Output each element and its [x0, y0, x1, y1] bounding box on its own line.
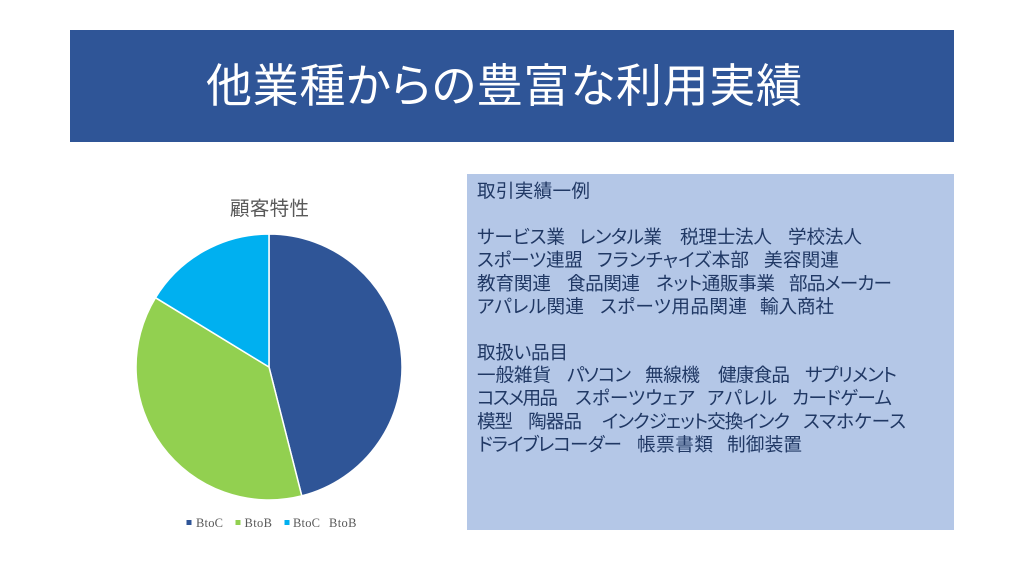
legend	[186, 516, 356, 530]
text block: products: カードゲーム	[792, 387, 892, 408]
text block: industries: レンタル業	[579, 226, 662, 247]
text block: products: アパレル	[707, 387, 777, 408]
text block: industries: スポーツ用品関連	[600, 296, 747, 317]
text block: industries: 学校法人	[788, 226, 862, 247]
text block: products: 帳票書類	[637, 434, 713, 455]
text block: products: 制御装置	[727, 434, 802, 455]
heading: products handled: 取扱い品目	[477, 342, 568, 363]
text block: industries: フランチャイズ本部	[597, 249, 749, 270]
heading: transaction examples: 取引実績一例	[477, 180, 590, 201]
text block: industries: アパレル関連	[477, 296, 584, 317]
text block: industries: ネット通販事業	[656, 273, 775, 294]
pie slice: BtoB	[136, 298, 302, 500]
legend: BtoB	[329, 516, 356, 530]
text block: products	[477, 364, 906, 455]
text block: products: インクジェット交換インク	[602, 411, 790, 432]
pie slice: BtoC	[269, 234, 402, 496]
legend: BtoC	[196, 516, 223, 530]
chart title: 顧客特性	[230, 198, 309, 220]
text block: products: 健康食品	[718, 364, 790, 385]
text block: industries: 教育関連	[477, 273, 551, 294]
text block: industries: 輸入商社	[760, 296, 834, 317]
pie chart: customer characteristics	[136, 198, 402, 530]
text block: products: 一般雑貨	[477, 364, 551, 385]
title banner: 他業種からの豊富な利用実績	[206, 60, 802, 112]
text block: products: パソコン	[567, 364, 631, 385]
text block: products: スマホケース	[803, 411, 906, 432]
text block: products: ドライブレコーダー	[478, 434, 622, 455]
text block: products: 陶器品	[528, 411, 582, 432]
title banner	[70, 30, 954, 142]
panel: transaction examples	[467, 174, 954, 530]
text block: industries: 部品メーカー	[789, 273, 892, 294]
legend: BtoC	[293, 516, 320, 530]
text block: industries: スポーツ連盟	[477, 249, 583, 270]
text block: products: サプリメント	[805, 364, 897, 385]
text block: products: 模型	[477, 411, 513, 432]
text block: industries	[477, 226, 892, 317]
text block: industries: 食品関連	[567, 273, 640, 294]
legend: BtoB	[244, 516, 272, 530]
text block: industries: 美容関連	[764, 249, 839, 270]
text block: products: スポーツウェア	[575, 387, 695, 408]
text block: products: 無線機	[645, 364, 700, 385]
text block: products: コスメ用品	[477, 387, 558, 408]
text block: industries: サービス業	[477, 226, 565, 247]
text block: industries: 税理士法人	[680, 226, 772, 247]
pie slice: BtoC BtoB	[156, 234, 269, 367]
